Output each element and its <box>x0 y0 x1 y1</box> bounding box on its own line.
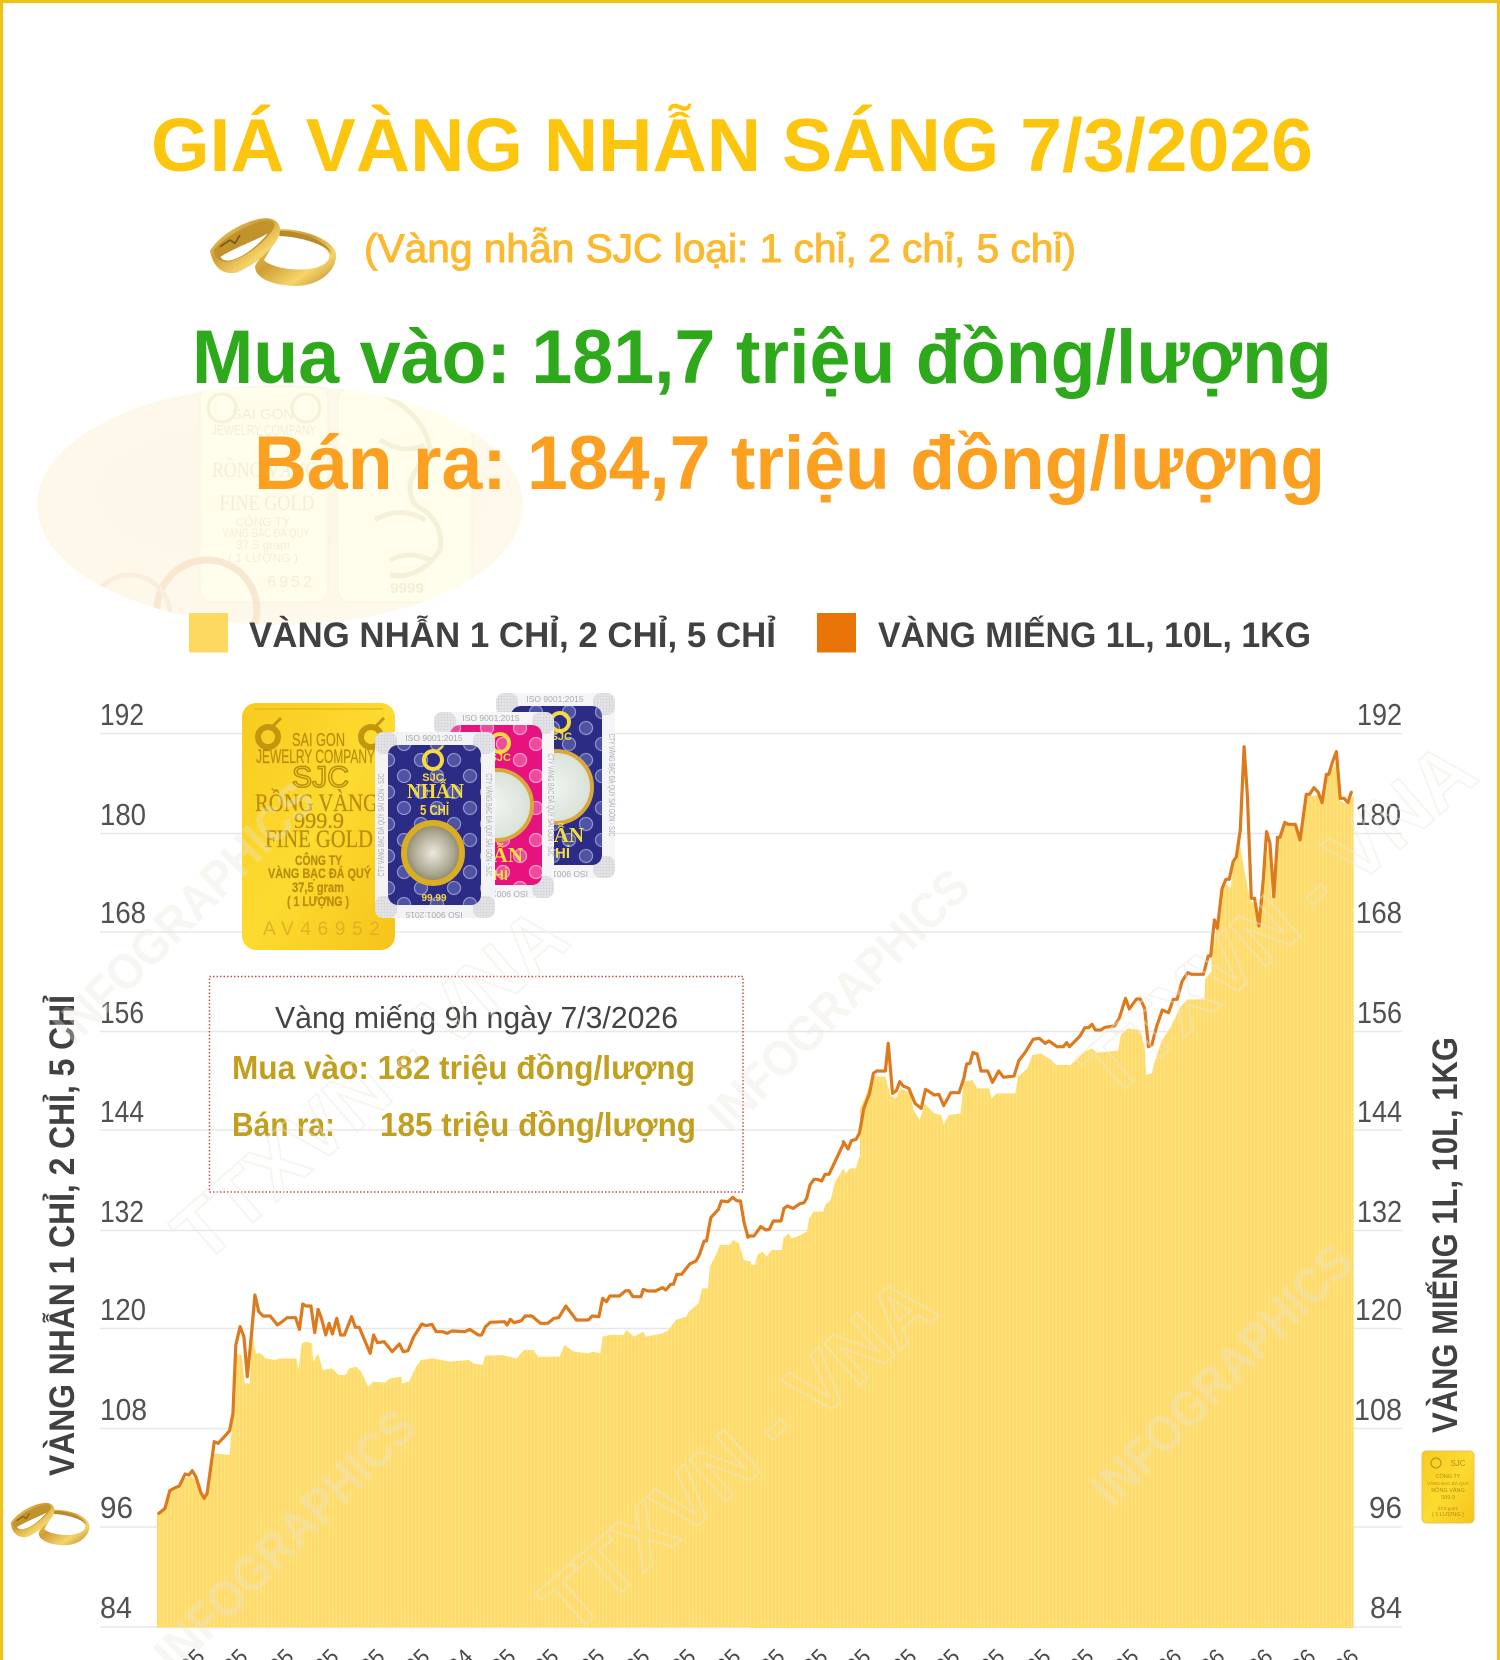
faded background photo of gold bars: 37,5 gram <box>236 538 290 552</box>
illustration: ring pack, pink middle: CTY VÀNG BẠC ĐÁ QUÝ SÀI GÒN - SJC <box>546 754 556 856</box>
watermark: INFOGRAPHICS and TTXVN - VNA: INFOGRAPHICS <box>1080 1233 1364 1517</box>
left axis values: 120 <box>100 1292 146 1327</box>
illustration: ring pack, navy front <box>375 732 495 920</box>
watermark: INFOGRAPHICS and TTXVN - VNA: INFOGRAPHICS <box>697 858 981 1142</box>
right axis values: 156 <box>1357 995 1402 1030</box>
line: gold bar price <box>159 747 1351 1513</box>
icon: small gold bar at right axis <box>1422 1451 1474 1523</box>
icon: small gold bar at right axis: VÀNG BẠC ĐÁ QUÝ <box>1427 1480 1469 1486</box>
left axis title: VÀNG NHẪN 1 CHỈ, 2 CHỈ, 5 CHỈ <box>42 995 82 1476</box>
illustration: ring pack, pink middle: NHẪN <box>461 842 523 867</box>
illustration: SJC gold bar: FINE GOLD <box>265 826 373 853</box>
illustration: ring pack, pink middle <box>434 712 556 899</box>
legend: VÀNG NHẪN 1 CHỈ, 2 CHỈ, 5 CHỈ <box>249 615 776 655</box>
illustration: ring pack, navy front: ISO 9001:2015 <box>405 733 463 743</box>
right axis values: 96 <box>1369 1490 1402 1525</box>
watermark: INFOGRAPHICS and TTXVN - VNA: TTXVN - VNA <box>1064 725 1492 1114</box>
icon: small gold bar at right axis: ( 1 LƯỢNG ) <box>1432 1512 1464 1518</box>
left axis values: 84 <box>100 1590 132 1625</box>
faded background photo of gold bars: JEWELRY COMPANY <box>212 422 316 439</box>
illustration: SJC gold bar: JEWELRY COMPANY <box>256 747 375 768</box>
right axis values <box>1354 697 1402 1625</box>
watermark: INFOGRAPHICS and TTXVN - VNA: TTXVN - VNA <box>156 890 584 1279</box>
headline: sell price: Bán ra: 184,7 triệu đồng/lượng <box>254 421 1325 506</box>
right axis values: 132 <box>1357 1194 1402 1229</box>
left axis values <box>100 697 147 1625</box>
right axis values: 180 <box>1355 797 1401 832</box>
left axis values: 132 <box>100 1194 144 1229</box>
bars: ring gold price <box>157 700 1354 1628</box>
left axis values: 144 <box>100 1094 144 1129</box>
illustration: SJC gold bar: AV46952 <box>263 919 380 940</box>
icon: small gold bar at right axis: CÔNG TY <box>1436 1473 1461 1480</box>
chart grid lines <box>100 734 1402 1627</box>
icon: gold wedding rings <box>210 218 336 286</box>
illustration: ring pack, navy back <box>496 693 617 879</box>
illustration: SJC gold bar: RỒNG VÀNG <box>255 788 378 817</box>
left axis values: 96 <box>100 1490 133 1525</box>
faded background photo of gold bars: ( 1 LƯỢNG ) <box>228 551 298 565</box>
icon: small gold bar at right axis: 37,5 gram <box>1438 1506 1458 1511</box>
illustration: SJC gold bar: SJC <box>292 761 349 794</box>
right axis values: 120 <box>1355 1292 1402 1327</box>
illustration: SJC gold bar: SAI GON <box>292 730 345 750</box>
icon: small gold bar at right axis: SJC <box>1450 1459 1466 1468</box>
illustration: ring pack, navy back: 1 CHỈ <box>532 845 570 862</box>
icon: rings at left axis <box>11 1503 89 1545</box>
faded background photo of gold bars: SAI GON <box>232 406 294 423</box>
right axis title: VÀNG MIẾNG 1L, 10L, 1KG <box>1425 1037 1465 1433</box>
illustration: ring pack, navy back: ISO 9001 <box>552 869 588 879</box>
faded background photo of gold bars: 6952 <box>267 574 315 591</box>
icon: small gold bar at right axis: 999.9 <box>1441 1495 1455 1501</box>
icon: small gold bar at right axis: RỒNG VÀNG <box>1431 1487 1465 1494</box>
illustration: ring pack, navy front: 5 CHỈ <box>420 802 449 819</box>
faded background photo of gold bars: CÔNG TY <box>236 514 290 529</box>
illustration: ring pack, navy back: CTY VÀNG BẠC ĐÁ QUÝ SÀI GÒN - SJC <box>607 734 617 836</box>
right axis values: 144 <box>1357 1094 1402 1129</box>
illustration: ring pack, pink middle: 2 CHỈ <box>470 867 508 884</box>
illustration: SJC gold bar: 999.9 <box>294 808 344 833</box>
illustration: SJC gold bar <box>242 703 395 950</box>
watermark: INFOGRAPHICS and TTXVN - VNA: INFOGRAPHICS <box>42 771 326 1055</box>
faded background photo of gold bars <box>37 385 523 625</box>
illustration: ring pack, navy front: 99.99 <box>421 893 447 904</box>
right axis values: 108 <box>1354 1392 1402 1427</box>
callout: gold bar price at 9h: Mua vào: 182 triệu đồng/lượng <box>232 1049 695 1086</box>
illustration: ring pack, navy front: CTY VÀNG BẠC ĐÁ QUÝ SÀI GÒN - SJC <box>376 774 386 876</box>
illustration: SJC gold bar: 37,5 gram <box>292 879 344 895</box>
faded background photo of gold bars: VÀNG BẠC ĐÁ QUÝ <box>222 525 310 540</box>
illustration: SJC gold bar: CÔNG TY <box>295 851 342 868</box>
subtitle: (Vàng nhẫn SJC loại: 1 chỉ, 2 chỉ, 5 chỉ) <box>364 226 1076 271</box>
legend <box>189 613 1311 655</box>
headline: buy price: Mua vào: 181,7 triệu đồng/lượng <box>192 315 1332 400</box>
illustration: SJC gold bar: VÀNG BẠC ĐÁ QUÝ <box>268 864 372 881</box>
callout: gold bar price at 9h: Vàng miếng 9h ngày 7/3/2026 <box>275 1000 678 1035</box>
title: GIÁ VÀNG NHẪN SÁNG 7/3/2026 <box>151 103 1313 187</box>
illustration: ring pack, pink middle: ISO 9001:2015 <box>462 713 520 723</box>
illustration: SJC gold bar: ( 1 LƯỢNG ) <box>287 893 349 909</box>
illustration: ring pack, navy front: ISO 9001:2015 <box>405 910 463 920</box>
x axis labels (clipped by the page edge) <box>175 1644 1364 1660</box>
left axis values: 156 <box>100 995 144 1030</box>
faded background photo of gold bars: 9999 <box>390 580 424 597</box>
watermark: INFOGRAPHICS and TTXVN - VNA: TTXVN - VNA <box>524 1260 952 1649</box>
left axis values: 168 <box>100 895 146 930</box>
illustration: ring pack, navy front: CTY VÀNG BẠC ĐÁ QUÝ SÀI GÒN - SJC <box>484 774 494 876</box>
illustration: ring pack, navy front: SJC <box>422 772 444 784</box>
right axis values: 168 <box>1356 895 1402 930</box>
right axis values: 84 <box>1370 1590 1402 1625</box>
left axis values: 108 <box>100 1392 147 1427</box>
illustration: ring pack, navy back: SJC <box>551 731 572 743</box>
left axis values: 180 <box>100 797 146 832</box>
callout: gold bar price at 9h: Bán ra: <box>232 1106 335 1143</box>
watermark: INFOGRAPHICS and TTXVN - VNA <box>42 725 1492 1660</box>
illustration: ring pack, navy back: NHẪN <box>522 822 584 847</box>
right axis values: 192 <box>1357 697 1402 732</box>
faded background photo of gold bars: FINE GOLD <box>220 490 314 515</box>
callout: gold bar price at 9h <box>210 976 743 1192</box>
callout: gold bar price at 9h: 185 triệu đồng/lượng <box>380 1106 696 1143</box>
left axis values: 192 <box>100 697 144 732</box>
illustration: ring pack, pink middle: SJC <box>490 752 511 764</box>
illustration: ring pack, navy front: NHẪN <box>407 778 464 803</box>
illustration: ring pack, navy back: ISO 9001:2015 <box>526 694 584 704</box>
legend: VÀNG MIẾNG 1L, 10L, 1KG <box>878 615 1311 655</box>
illustration: ring pack, pink middle: ISO 9001 <box>492 889 528 899</box>
faded background photo of gold bars: RỒNG VÀNG <box>212 457 318 482</box>
